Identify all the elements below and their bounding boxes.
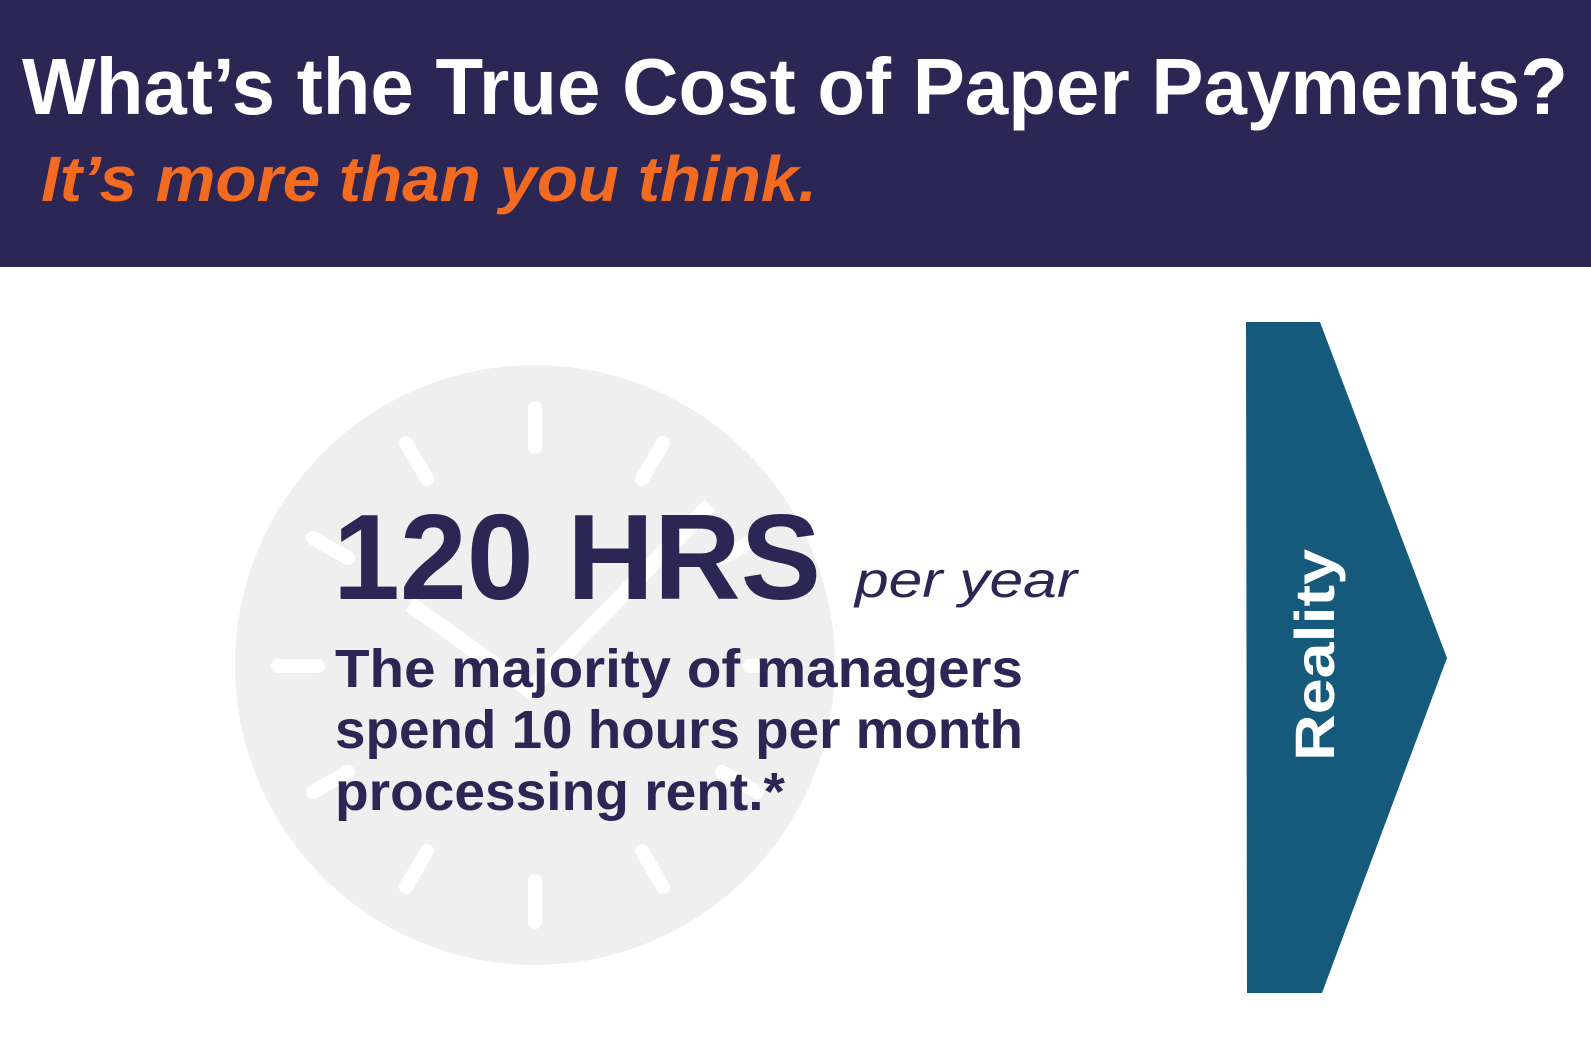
icon: clock — [235, 365, 835, 965]
title: What’s the True Cost of Paper Payments? — [22, 42, 1568, 131]
text block: description: spend 10 hours per month — [335, 700, 1023, 760]
subtitle: It’s more than you think. — [41, 143, 817, 215]
text block: description: processing rent.* — [335, 762, 785, 822]
arrow: Reality: Reality — [1283, 549, 1346, 761]
stat: 120 HRS per year: 120 HRS — [333, 489, 821, 625]
stat: 120 HRS per year: per year — [853, 552, 1080, 608]
text block: description — [335, 639, 1023, 822]
header banner — [0, 0, 1591, 267]
stat: 120 HRS per year — [333, 489, 1080, 625]
text block: description: The majority of managers — [335, 639, 1023, 699]
arrow: Reality — [1246, 322, 1447, 993]
